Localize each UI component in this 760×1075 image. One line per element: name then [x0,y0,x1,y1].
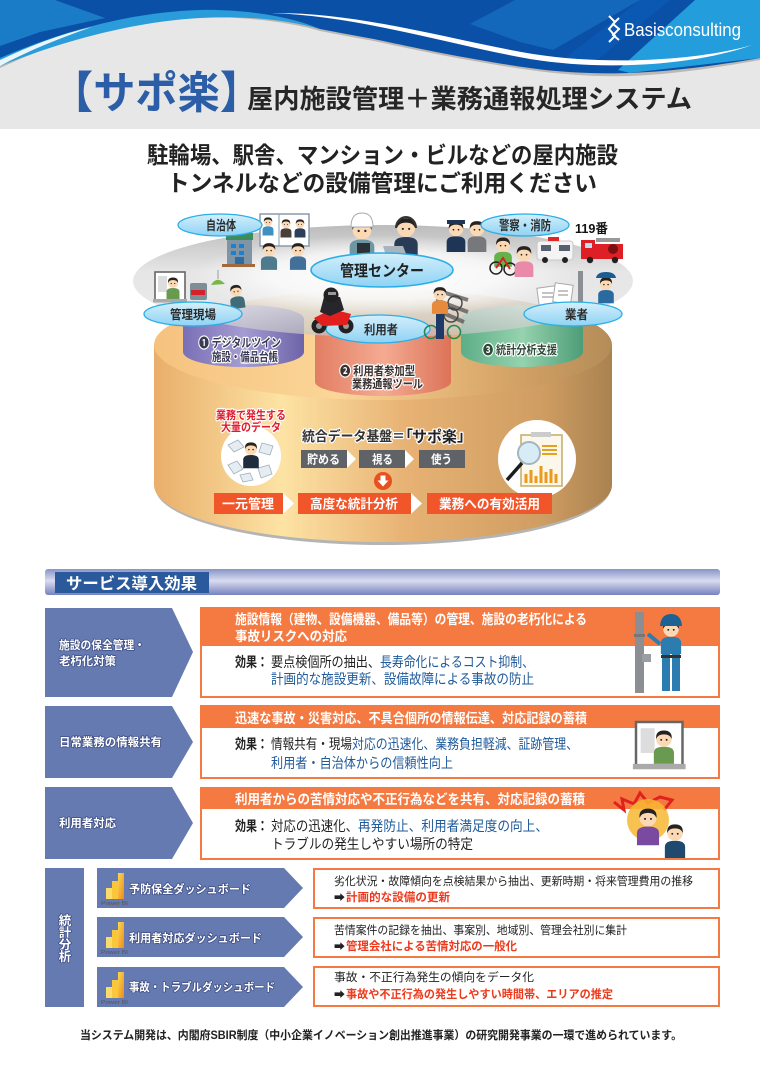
cylinder label 1 [199,335,281,364]
dashboard row: user response [97,917,719,957]
process: outcomes: 高度な統計分析 [310,496,398,512]
process: outcomes [214,493,552,514]
cylinder 1: digital twin [183,305,304,367]
effect panel [200,705,720,778]
dashboard arrow [97,917,303,957]
label: 自治体 [178,214,262,236]
dashboard description: ➡ [334,941,345,953]
icon: fire engine [581,238,623,263]
label: 警察・消防: 警察・消防 [499,218,551,233]
section bar: service effects [45,569,720,595]
logo: Basisconsulting: Basisconsulting [624,19,741,40]
label: 警察・消防 [481,214,569,236]
process: store view use: 貯める [307,452,340,466]
dashboard description: 管理会社による苦情対応の一般化 [346,939,517,953]
dashboard description: 事故・不正行為発生の傾向をデータ化 [334,970,535,984]
dashboard description: 事故や不正行為の発生しやすい時間帯、エリアの推定 [346,987,613,1001]
process: store view use: 視る [372,452,393,466]
dashboard arrow [97,868,303,908]
icon: down arrow [374,472,392,490]
icon: police and citizen [447,220,486,252]
effect panel: 施設情報（建物、設備機器、備品等）の管理、施設の老朽化による [235,611,587,627]
label: 管理センター [311,253,453,287]
label: 管理センター: 管理センター [340,261,424,280]
platform diagram [133,213,633,545]
icon: ambulance [537,237,573,263]
cylinder label 2 [340,363,423,391]
arrow label [45,706,193,778]
effect panel: 事故リスクへの対応 [235,628,347,644]
dashboard arrow: 予防保全ダッシュボード [129,882,251,896]
heading: integrated data platform: 「 [398,428,413,445]
title: 【サポ楽】 [51,69,262,118]
icon: person with bicycles [424,287,468,339]
icon: vendor documents [537,283,573,307]
logo: Basisconsulting [609,16,741,42]
icon: person buried in paper [221,426,281,486]
arrow label: 日常業務の情報共有 [59,735,162,749]
dashboard arrow: 事故・トラブルダッシュボード [129,980,275,994]
section bar: service effects: サービス導入効果 [66,574,197,593]
effect panel: 再発防止、利用者満足度の向上、 [358,818,548,834]
arrow label: 老朽化対策 [59,654,116,668]
heading: integrated data platform: 統合データ基盤＝ [302,428,405,444]
dashboard row: preventive maintenance [97,868,719,908]
row 2: daily information sharing [45,705,720,778]
cylinder label 2: ❷ 利用者参加型 [340,363,415,378]
icon: bicycle accident [490,238,533,277]
icon: site manager booth [153,272,187,302]
stakeholder disc [133,225,633,337]
dashboard description: 劣化状況・故障傾向を点検結果から抽出、更新時期・将来管理費用の推移 [334,874,693,888]
statistics side label: 統 [59,913,72,928]
icon: video conference [260,214,309,270]
statistics side label: 計 [59,925,72,940]
icon: report clipboard with magnifier [498,420,576,498]
statistics side label: 分 [59,938,72,952]
effect panel: 対応の迅速化、業務負担軽減、証跡管理、 [352,736,578,752]
effect panel [200,787,720,859]
row 3: user response [45,787,720,859]
arrow label [45,787,193,859]
large orange cylinder [154,290,612,545]
caption: large data volume [216,408,286,434]
header background [0,0,760,129]
cylinder 2: user reporting [315,321,451,396]
effect panel [200,607,720,697]
effect panel: 対応の迅速化、 [271,818,358,834]
icon: facility manager booth [633,722,686,769]
label: 業者 [524,302,622,326]
dashboard arrow: 利用者対応ダッシュボード [129,931,262,945]
dashboard arrow: Power BI [101,1000,129,1006]
dashboard row: accidents and trouble [97,967,719,1007]
effect panel: 効果： [235,654,268,670]
icon: operator with headset [383,217,418,259]
label: 業者: 業者 [565,307,588,322]
title [51,69,692,118]
cylinder label 2: 業務通報ツール [352,376,423,391]
footer note: 当システム開発は、内閣府SBIR制度（中小企業イノベーション創出推進事業）の研究開発事業の一環で進められています。 [80,1028,682,1042]
dashboard description: 苦情案件の記録を抽出、事案別、地域別、管理会社別に集計 [334,923,627,937]
heading: integrated data platform [302,427,472,446]
cylinder label 1: ❶ デジタルツイン [199,335,281,350]
effect panel: 利用者からの苦情対応や不正行為などを共有、対応記録の蓄積 [235,791,585,807]
effect panel: 効果： [235,736,268,752]
row 1: facility maintenance [45,607,720,697]
dashboard arrow: Power BI [101,901,129,907]
label: 自治体: 自治体 [206,218,236,233]
cylinder 3: statistics [461,305,583,367]
title: 屋内施設管理＋業務通報処理システム [247,84,692,114]
icon: generator [190,283,207,300]
dashboard arrow: Power BI [101,950,129,956]
label: 利用者: 利用者 [364,322,398,337]
effect panel: 要点検個所の抽出、 [271,654,380,670]
effect panel: 効果： [235,818,268,834]
icon: helmet worker [350,213,374,260]
effect panel: 迅速な事故・災害対応、不具合個所の情報伝達、対応記録の蓄積 [235,710,587,726]
label: 管理現場 [144,302,242,326]
dashboard description: ➡ [334,892,345,904]
arrow label: 利用者対応 [59,816,116,830]
lead heading [147,142,618,196]
statistics side label: 析 [59,949,72,964]
label: 119番: 119番 [575,221,608,236]
icon: angry caller and apologetic staff [614,793,685,858]
caption: large data volume: 業務で発生する [216,408,286,422]
lead heading: 駐輪場、駅舎、マンション・ビルなどの屋内施設 [147,142,618,168]
heading: integrated data platform: 」 [457,428,472,445]
arrow label [45,608,193,697]
arrow label: 施設の保全管理・ [59,638,145,652]
heading: integrated data platform: サポ楽 [412,427,457,446]
caption: large data volume: 大量のデータ [221,420,281,434]
dashboard description: ➡ [334,989,345,1001]
effect panel: 利用者・自治体からの信頼性向上 [271,755,453,771]
dashboard description: 計画的な設備の更新 [346,890,451,904]
label: 利用者 [326,315,430,343]
icon: city hall [222,233,255,267]
header blue wave [0,0,760,76]
process: store view use: 使う [431,452,452,466]
effect panel: 計画的な施設更新、設備故障による事故の防止 [271,671,534,687]
dashboard description [314,918,719,957]
effect panel: トラブルの発生しやすい場所の特定 [271,836,473,852]
cylinder label 1: 施設・備品台帳 [212,349,278,364]
process: outcomes: 業務への有効活用 [439,496,540,512]
dashboard description [314,869,719,908]
process: store view use [301,450,465,468]
dashboard description [314,967,719,1006]
effect panel: 情報共有・現場 [271,736,352,752]
icon: vendor worker [578,271,616,303]
statistics side label [45,868,84,1007]
effect panel: 長寿命化によるコスト抑制、 [380,654,534,670]
process: outcomes: 一元管理 [222,496,274,512]
cylinder label 3: ❸ 統計分析支援 [483,342,557,357]
icon: lamp repair [211,270,246,309]
label: 管理現場: 管理現場 [170,307,216,322]
dashboard arrow [97,967,303,1007]
lead heading: トンネルなどの設備管理にご利用ください [167,170,597,196]
icon: motorcycle [312,288,354,334]
icon: pipe repair worker [634,612,682,693]
